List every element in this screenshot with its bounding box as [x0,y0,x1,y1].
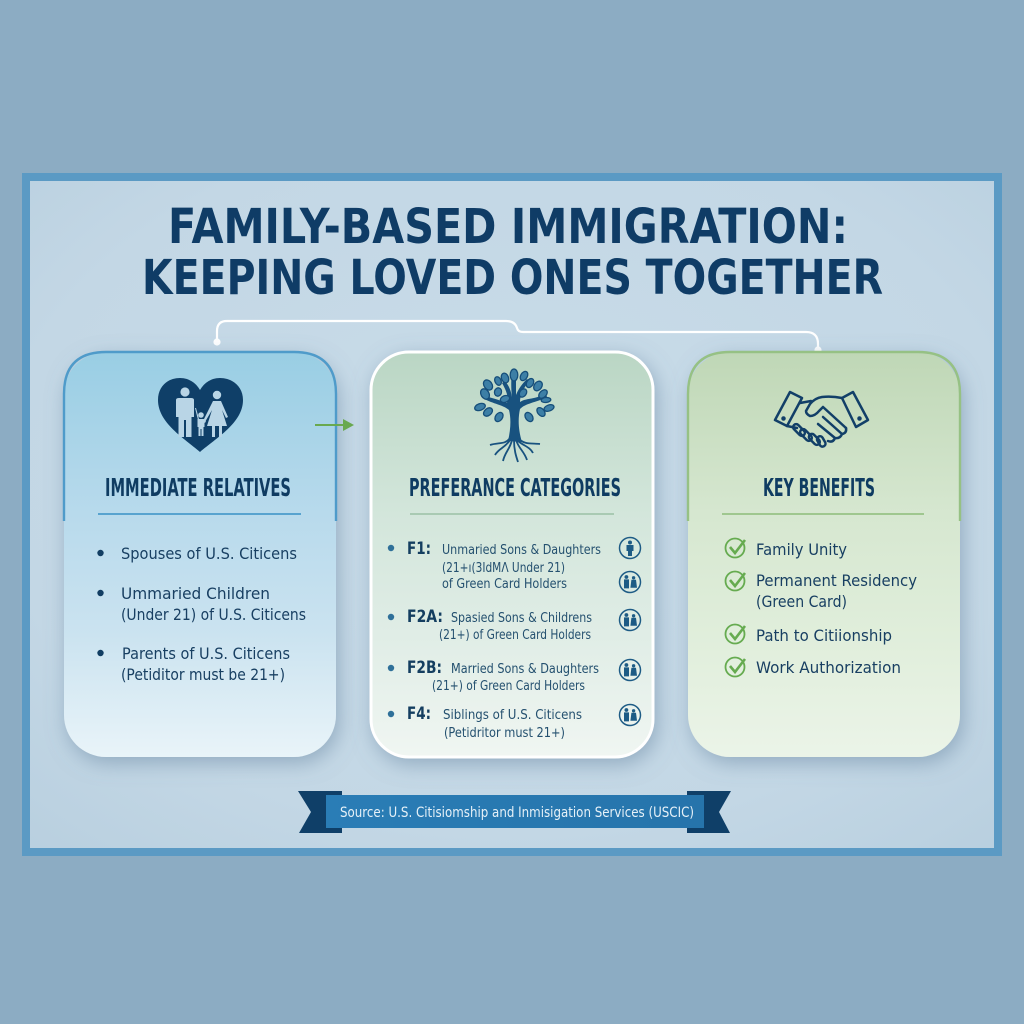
icon: tree [474,369,555,462]
panel: preference categories [371,352,653,757]
category F2B: (21+) of Green Card Holders [432,679,585,694]
category F2B: F2B: [407,658,442,678]
category F2A: F2A: [407,607,443,627]
heading rule [98,513,301,515]
category F4: Siblings of U.S. Citicens [443,708,582,723]
card background [688,352,960,757]
heading rule [722,513,924,515]
category F4 [388,704,582,741]
source ribbon: Source: U.S. Citisiomship and Inmisigation Services (USCIC) [340,805,694,821]
panel: key benefits [688,352,960,757]
title [142,199,883,306]
icon: person badges [620,538,640,726]
source ribbon [298,791,731,833]
card background [64,352,336,757]
list: (Petiditor must be 21+) [121,665,285,684]
heading rule [410,513,614,515]
category F1: (21+ı(3IdMΛ Under 21) [442,561,565,576]
list: (Under 21) of U.S. Citicens [121,605,306,624]
category F2A: (21+) of Green Card Holders [439,628,591,643]
card background [371,352,653,757]
title: KEEPING LOVED ONES TOGETHER [142,250,883,306]
main framed panel [26,177,998,852]
title: FAMILY-BASED IMMIGRATION: [168,199,848,255]
benefits list: Family Unity [756,540,847,559]
category F1: Unmaried Sons & Daughters [442,543,601,558]
category F2B: Married Sons & Daughters [451,662,599,677]
category F2A [388,607,592,643]
list: Ummaried Children [121,584,270,603]
icon: heart with family [158,378,243,452]
benefits list [726,538,917,677]
category F1: F1: [407,539,431,559]
heading: IMMEDIATE RELATIVES [105,473,291,502]
benefits list: (Green Card) [756,592,847,611]
card top border [688,352,960,521]
panel: immediate relatives [64,352,336,757]
category F4: (Petidritor must 21+) [444,726,565,741]
arrow [315,419,354,431]
heading: PREFERANCE CATEGORIES [409,473,621,502]
benefits list: Path to Citiionship [756,626,892,645]
category F1 [388,539,601,592]
icon: handshake [775,392,868,448]
card top border [64,352,336,521]
list: Spouses of U.S. Citicens [121,544,297,563]
list: Parents of U.S. Citicens [122,644,290,663]
connector line between cards [213,321,822,354]
category F1: of Green Card Holders [442,577,567,592]
benefits list: Permanent Residency [756,571,917,590]
category F2A: Spasied Sons & Childrens [451,611,592,626]
benefits list: Work Authorization [756,658,901,677]
heading: KEY BENEFITS [763,473,875,502]
category F2B [388,658,599,694]
list [97,544,306,684]
category F4: F4: [407,704,431,724]
